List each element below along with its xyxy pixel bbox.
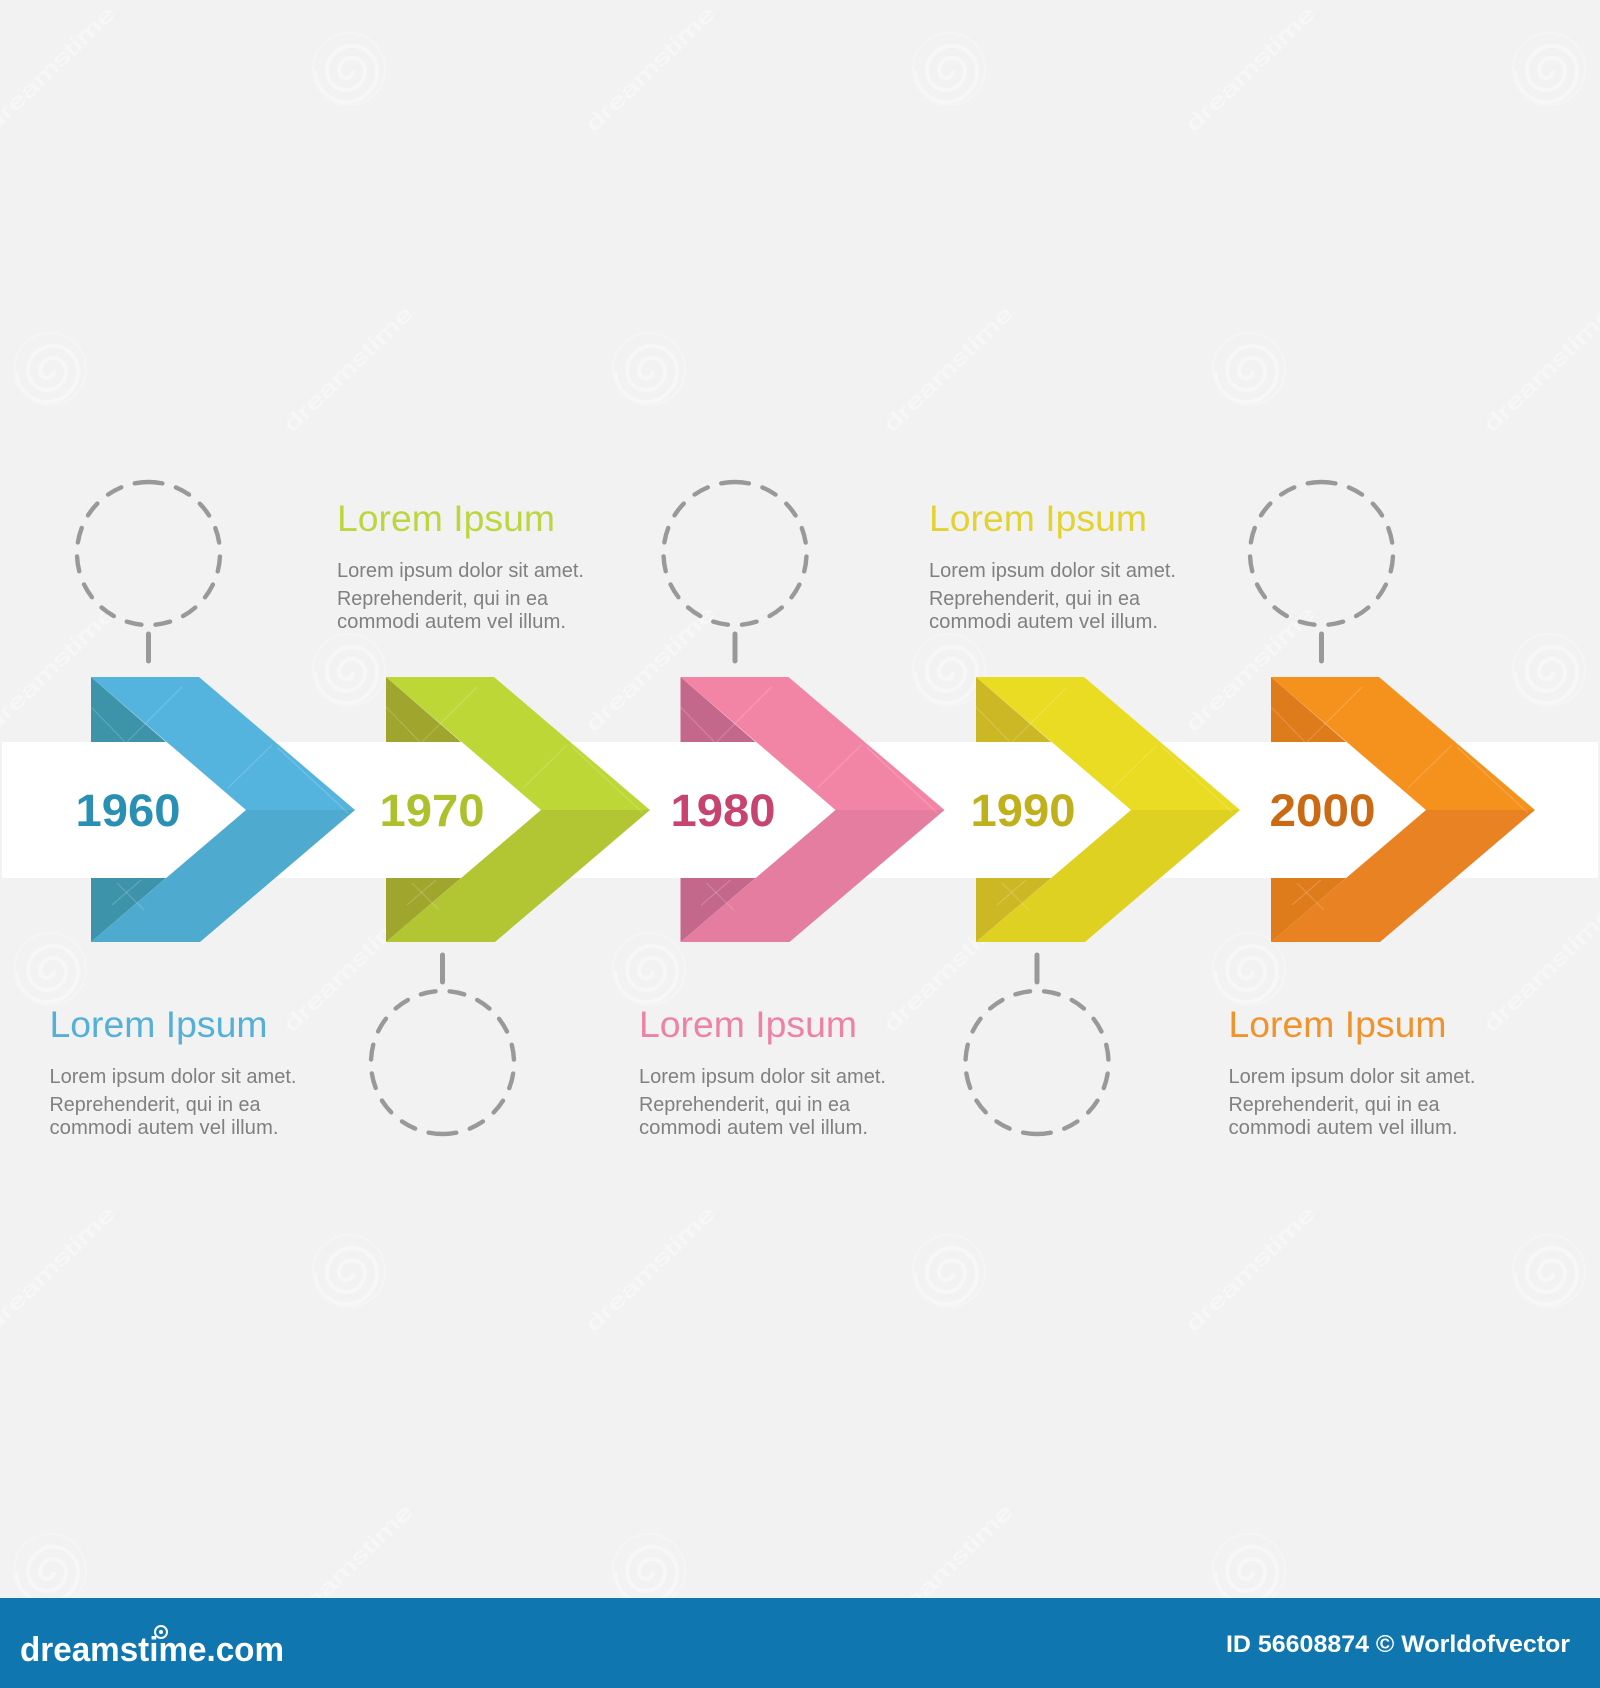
text block 1970: Lorem Ipsum bbox=[337, 498, 555, 539]
watermark pattern: dreamstime bbox=[581, 1202, 720, 1337]
watermark pattern: dreamstime bbox=[879, 302, 1018, 437]
dashed circle 1980 bbox=[664, 482, 806, 625]
chevron 2000 bbox=[1271, 677, 1535, 942]
text block 1980 bbox=[639, 1004, 886, 1139]
year 1980: 1980 bbox=[670, 785, 776, 836]
step 1980 bbox=[639, 482, 944, 1139]
step 1990 bbox=[929, 498, 1240, 1134]
dashed circle 2000 bbox=[1250, 482, 1393, 625]
watermark pattern: dreamstime bbox=[581, 602, 720, 737]
dashed circle 1970 bbox=[371, 991, 514, 1134]
text block 1980: Lorem Ipsum bbox=[639, 1004, 857, 1045]
text block 1990: Reprehenderit, qui in ea bbox=[929, 588, 1141, 610]
step 2000 bbox=[1228, 482, 1535, 1139]
watermark pattern: dreamstime bbox=[279, 1500, 418, 1635]
text block 1990: Lorem Ipsum bbox=[929, 498, 1147, 539]
step 1960 bbox=[50, 482, 355, 1139]
text block 1990: Lorem ipsum dolor sit amet. bbox=[929, 560, 1176, 582]
chevron 1960 bbox=[91, 677, 355, 942]
watermark pattern: dreamstime bbox=[1479, 302, 1600, 437]
text block 1990 bbox=[929, 498, 1176, 633]
watermark pattern: dreamstime bbox=[581, 2, 720, 137]
connector 1980 bbox=[732, 634, 738, 661]
text block 1960: Lorem Ipsum bbox=[50, 1004, 268, 1045]
text block 1990: commodi autem vel illum. bbox=[929, 611, 1158, 633]
text block 2000: Lorem Ipsum bbox=[1228, 1004, 1446, 1045]
text block 1970: Reprehenderit, qui in ea bbox=[337, 588, 549, 610]
text block 1980: Lorem ipsum dolor sit amet. bbox=[639, 1066, 886, 1088]
text block 1960: Reprehenderit, qui in ea bbox=[50, 1094, 261, 1116]
footer logo: dreamstime.com bbox=[20, 1631, 284, 1669]
text block 1960 bbox=[50, 1004, 296, 1139]
watermark pattern: dreamstime bbox=[279, 302, 418, 437]
connector 1970 bbox=[440, 955, 445, 982]
chevron 1970 bbox=[386, 677, 650, 942]
watermark pattern: dreamstime bbox=[879, 1500, 1018, 1635]
white timeline band bbox=[2, 742, 1598, 878]
watermark pattern: dreamstime bbox=[1181, 2, 1320, 137]
text block 1980: commodi autem vel illum. bbox=[639, 1117, 868, 1139]
text block 1960: Lorem ipsum dolor sit amet. bbox=[50, 1066, 296, 1088]
dashed circle 1990 bbox=[966, 991, 1108, 1134]
watermark pattern: dreamstime bbox=[1181, 1202, 1320, 1337]
chevron 1980 bbox=[680, 677, 944, 942]
watermark pattern: dreamstime bbox=[879, 902, 1018, 1037]
year 1960: 1960 bbox=[76, 785, 180, 836]
footer bar bbox=[0, 1598, 1600, 1688]
watermark pattern: dreamstime bbox=[1479, 902, 1600, 1037]
text block 2000: Lorem ipsum dolor sit amet. bbox=[1228, 1066, 1476, 1088]
footer credit: ID 56608874 © Worldofvector bbox=[1226, 1631, 1570, 1658]
year 1990: 1990 bbox=[970, 785, 1076, 836]
year 2000: 2000 bbox=[1270, 785, 1376, 836]
text block 1980: Reprehenderit, qui in ea bbox=[639, 1094, 851, 1116]
text block 2000: Reprehenderit, qui in ea bbox=[1228, 1094, 1440, 1116]
watermark pattern: dreamstime bbox=[1181, 602, 1320, 737]
text block 1970 bbox=[337, 498, 584, 633]
chevron 1990 bbox=[976, 677, 1240, 942]
text block 1960: commodi autem vel illum. bbox=[50, 1117, 278, 1139]
text block 1970: commodi autem vel illum. bbox=[337, 611, 566, 633]
step 1970 bbox=[337, 498, 650, 1134]
text block 2000: commodi autem vel illum. bbox=[1228, 1117, 1458, 1139]
connector 1960 bbox=[146, 634, 151, 661]
text block 1970: Lorem ipsum dolor sit amet. bbox=[337, 560, 584, 582]
connector 2000 bbox=[1319, 634, 1324, 661]
year 1970: 1970 bbox=[380, 785, 484, 836]
watermark pattern: dreamstime bbox=[279, 902, 418, 1037]
connector 1990 bbox=[1034, 955, 1040, 982]
text block 2000 bbox=[1228, 1004, 1476, 1139]
dashed circle 1960 bbox=[77, 482, 220, 625]
